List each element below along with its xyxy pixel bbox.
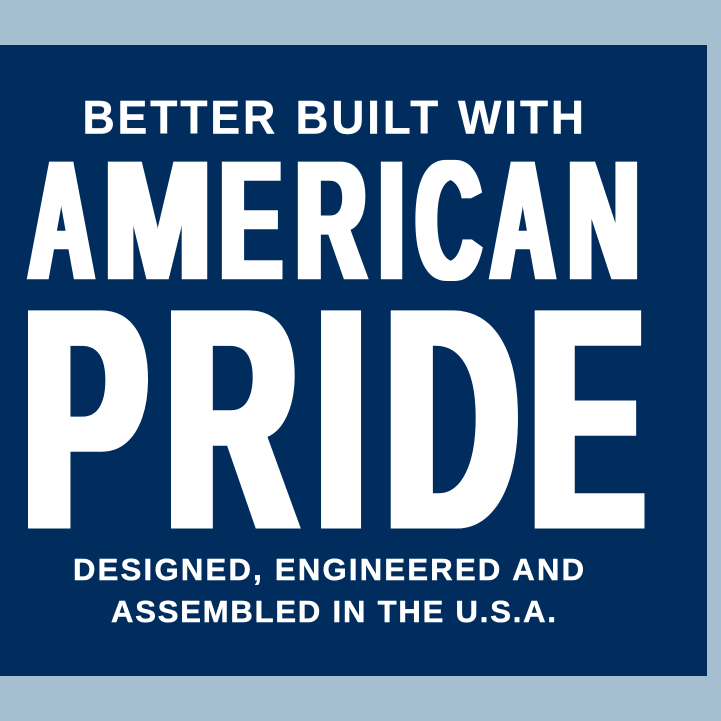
title: american: A [491,125,554,316]
title: american: A [29,125,94,316]
title: pride [24,242,643,596]
heading: better built with: BUILT [296,90,441,144]
title: american [29,125,639,316]
title: pride: P [24,242,146,596]
title: pride: D [387,242,518,596]
title: american: C [416,125,481,316]
title: american: R [296,125,366,316]
title: pride: R [167,242,296,596]
title: american: M [104,125,211,316]
heading: better built with: WITH [458,90,587,144]
title: pride: I [318,242,364,596]
heading: better built with: BETTER [82,90,278,144]
text: assembled line: ASSEMBLED IN THE U.S.A. [111,594,556,629]
title: american: N [568,125,639,316]
title: american: I [380,125,404,316]
title: american: E [220,125,282,316]
text: designed line: DESIGNED, ENGINEERED AND [73,552,584,587]
